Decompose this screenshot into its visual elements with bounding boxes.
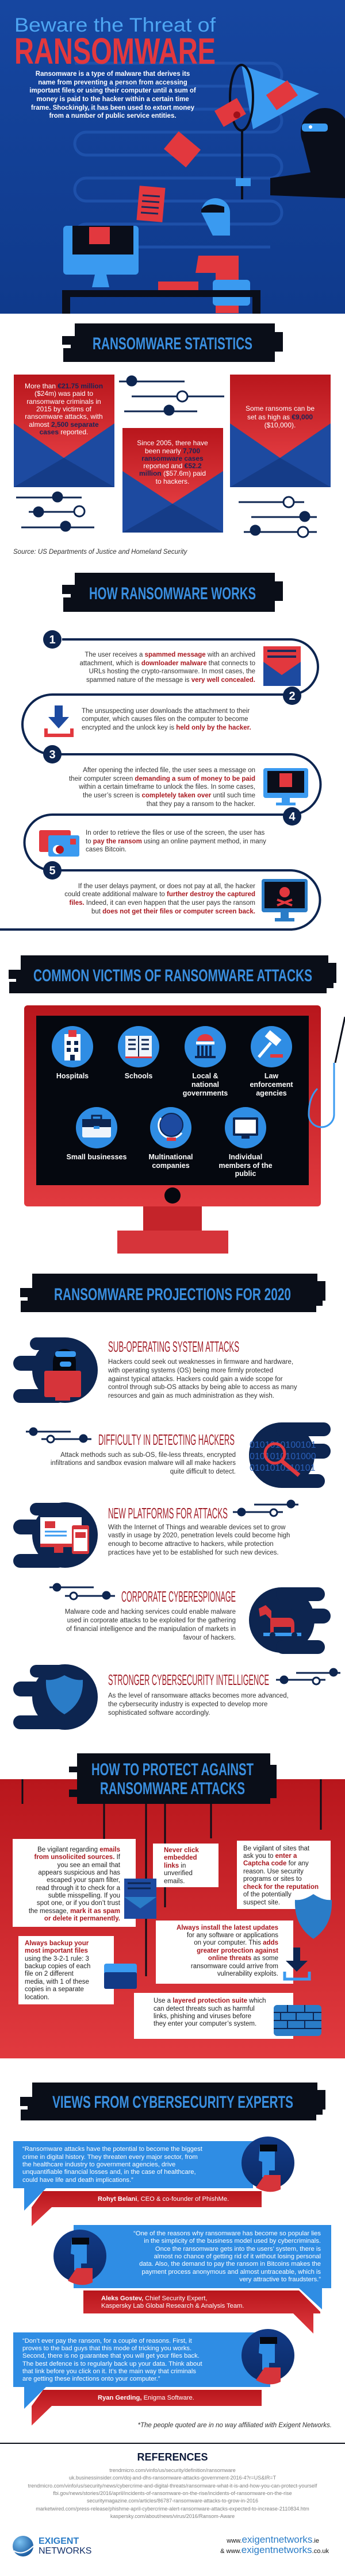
- quote 1: “Ransomware attacks have the potential to become the biggest: [22, 2146, 203, 2153]
- step 4: [39, 830, 266, 857]
- step numbers: 5: [49, 865, 56, 877]
- tip: backups: copies in a separate: [25, 1986, 84, 1993]
- heading: common victims: [9, 955, 336, 993]
- projection 4: corporate cyberespionage: favour of hackers.: [183, 1634, 236, 1641]
- icon: download: [46, 705, 72, 735]
- tip: updates: online threats as some: [208, 1955, 278, 1962]
- tip: emails: you see an email that: [57, 1862, 121, 1869]
- icon: monitor with skull: [262, 879, 308, 921]
- step 1: attachment, which is downloader malware that connects to: [79, 660, 255, 667]
- step 3: [69, 767, 308, 808]
- icon: shield: [295, 1894, 332, 1939]
- projection 2: detecting hackers: Attack methods such as sub-OS, file-less threats, encrypted: [60, 1452, 236, 1459]
- tip: emails: from unsolicited sources. If: [34, 1854, 121, 1861]
- step numbers: 4: [289, 811, 296, 823]
- step 1: [79, 646, 301, 686]
- stat envelope: right: [230, 375, 331, 487]
- stat envelope: left: 2015 by victims of: [36, 405, 92, 413]
- stat envelope: left: ($24m) was paid to: [34, 390, 93, 398]
- victim labels: [56, 1072, 293, 1178]
- tip: captcha: [237, 1841, 331, 1909]
- website urls: [220, 2534, 329, 2555]
- projection 3: new platforms: enough to become attractive to hackers, while protection: [108, 1541, 274, 1548]
- tip: updates: for any software or applications: [187, 1932, 278, 1939]
- victim labels: agencies: [256, 1089, 287, 1097]
- title: Beware the Threat of: [14, 14, 216, 36]
- projection 5: stronger intelligence: [13, 1664, 340, 1730]
- victim labels: companies: [152, 1162, 190, 1170]
- tip: emails: or delete it permanently.: [44, 1915, 120, 1922]
- heading: how to protect: HOW TO PROTECT AGAINST: [91, 1760, 254, 1779]
- projection 4: corporate cyberespionage: Malware code and hacking services could enable malware: [65, 1609, 236, 1615]
- stat envelope: middle: ransomware cases: [141, 454, 204, 462]
- projection 4: corporate cyberespionage: [49, 1584, 331, 1654]
- icon: payment cards: [39, 830, 79, 857]
- heading: projections: [20, 1274, 325, 1312]
- references: trendmicro.com/vinfo/us/security/news/cybercrime-and-digital-threats/ransomware-what-it-is-and-how-you-can-protect-yourself: [28, 2483, 317, 2489]
- tip: captcha: suspect site.: [243, 1899, 280, 1906]
- stat envelope: right: ($10,000).: [264, 421, 296, 429]
- quote 2: payment process anonymous and almost untraceable, which is: [141, 2269, 321, 2276]
- illustration: hacker with net: [136, 65, 345, 222]
- hero banner: [0, 0, 345, 314]
- step 4: cases Bitcoin.: [86, 846, 126, 853]
- tip: backups: most important files: [25, 1948, 88, 1954]
- projection 3: new platforms: vastly in usage by 2020, penetration levels could become high: [108, 1532, 290, 1539]
- projection 1: sub-os attacks: [13, 1337, 297, 1403]
- stat envelope: middle: reported and €52.2: [143, 462, 202, 470]
- stat envelope: middle: million ($57.6m) paid: [139, 469, 206, 477]
- quote 1: [13, 2137, 294, 2226]
- tip: backups: Always backup your: [25, 1940, 89, 1947]
- logo: [13, 2536, 91, 2556]
- heading: how ransomware works: [62, 573, 283, 612]
- intro text: frame. Shockingly, it has been used to extort money: [31, 105, 195, 111]
- tip: emails: spot one, or if you don’t trust: [37, 1900, 121, 1907]
- step 3: that they pay a ransom to the hacker.: [147, 801, 255, 808]
- step numbers: 2: [289, 690, 296, 703]
- website urls: www.exigentnetworks.ie: [226, 2534, 319, 2545]
- references: securitymagazine.com/articles/86787-ransomware-attacks-to-grow-in-2016: [87, 2498, 258, 2504]
- projection 5: stronger intelligence: sophisticated software accordingly.: [108, 1710, 210, 1717]
- tip: emails: escaped your spam filter,: [47, 1877, 120, 1884]
- icon: hacker at computer: [13, 1337, 98, 1403]
- icon: magnifier over code: [249, 1422, 331, 1488]
- stat envelope: left: More than €21.75 million: [25, 382, 103, 390]
- tip: captcha: programs or sites to: [243, 1876, 302, 1883]
- stat envelope: middle: Since 2005, there have: [137, 439, 208, 447]
- victim labels: Hospitals: [56, 1072, 89, 1080]
- tip: updates: vulnerability exploits.: [217, 1970, 278, 1977]
- quote 1: crime in digital history. They threaten every major sector, from: [22, 2154, 198, 2161]
- victim labels: Small businesses: [67, 1153, 127, 1161]
- logo: EXIGENT: [39, 2536, 79, 2546]
- intro text: from a number of public service entities.: [49, 113, 177, 119]
- tip: updates: greater protection against: [197, 1948, 278, 1954]
- projection 3: new platforms: With the Internet of Things and wearable devices set to grow: [108, 1524, 286, 1531]
- tip: emails: subtle misspelling. If you: [48, 1892, 120, 1899]
- icon: small businesses: [76, 1107, 117, 1148]
- intro text: money is paid to the hacker within a certain time: [36, 96, 189, 103]
- quote 2: Aleks Gostev, Chief Security Expert,: [101, 2295, 207, 2302]
- icon: devices: [13, 1502, 98, 1568]
- tip: links: unverified: [164, 1870, 193, 1877]
- quote 3: [13, 2329, 294, 2425]
- tip: links: links in: [164, 1862, 186, 1869]
- tip: backups: location.: [25, 1994, 49, 2001]
- step 2: [46, 705, 251, 735]
- quote 3: Second, there is no guarantee that you will get your files back.: [22, 2353, 200, 2359]
- tip: emails: Be vigilant regarding emails: [37, 1846, 120, 1853]
- tip: updates: ransomware could arrive from: [191, 1963, 278, 1970]
- tip: backups: file on 2 different: [25, 1970, 74, 1977]
- tip: links: emails.: [164, 1878, 185, 1885]
- panel: how to protect: [0, 1753, 345, 2058]
- heading: ransomware statistics: [62, 323, 283, 362]
- source note: Source: US Departments of Justice and Homeland Security: [13, 549, 188, 556]
- stat envelope: left: ransomware attacks, with: [25, 412, 103, 421]
- tip: protection suite: Use a layered protection suite which: [154, 1997, 266, 2004]
- icon: envelope: [263, 646, 301, 686]
- victim labels: Individual: [229, 1153, 262, 1161]
- quote 2: data. Also, the demand to pay the ransom in Bitcoins makes the: [139, 2261, 321, 2268]
- tip: emails: [13, 1839, 136, 1927]
- icon: magnifier over code: 0101010110101: [250, 1463, 316, 1473]
- victim labels: Law: [264, 1072, 278, 1080]
- tip: captcha: of the potentially: [243, 1891, 292, 1898]
- references: fbi.gov/news/stories/2016/april/incidents-of-ransomware-on-the-rise/incidents-of-ransomware-on-the-rise: [53, 2490, 292, 2496]
- victim labels: public: [235, 1170, 256, 1178]
- projection 3: new platforms: [13, 1501, 298, 1568]
- victim labels: members of the: [218, 1162, 273, 1170]
- icon: shield: [13, 1664, 98, 1730]
- tip: captcha: Captcha code for any: [243, 1860, 309, 1867]
- quote 1: Rohyt Belani, CEO & co-founder of PhishMe.: [98, 2196, 229, 2203]
- tip: protection suite: [134, 1993, 293, 2039]
- tip: backups: using the 3-2-1 rule: 3: [25, 1956, 89, 1962]
- intro text: important files or using their computer until a sum of: [29, 87, 196, 94]
- icon: avatar: [53, 2230, 106, 2285]
- icon: multinational companies: [150, 1107, 191, 1148]
- tip: links: Never click: [164, 1847, 199, 1854]
- illustration: victim at computer: [62, 198, 260, 314]
- step numbers: [43, 630, 301, 880]
- stat envelope: right: set as high as €9,000: [247, 413, 313, 421]
- quote 2: Once the ransomware gets into the users’ system, there is: [155, 2246, 321, 2253]
- quote 3: proves to the bad guys that this mode of tricking you works.: [22, 2345, 191, 2352]
- quote 2: almost no chance of getting rid of it without losing personal: [154, 2253, 321, 2260]
- website urls: & www.exigentnetworks.co.uk: [220, 2544, 329, 2555]
- tip: captcha: reason. Use security: [243, 1868, 304, 1875]
- stat envelope: left: [14, 375, 114, 487]
- icon: individuals: [225, 1107, 266, 1148]
- projection 4: corporate cyberespionage: of financial intelligence and the manipulation of markets in: [66, 1626, 236, 1633]
- references: marketwired.com/press-release/phishme-april-cybercrime-alert-ransomware-attacks-expected-to-increase-2110834.htm: [36, 2506, 309, 2512]
- heading: ransomware statistics: RANSOMWARE STATISTICS: [93, 334, 252, 353]
- step numbers: 3: [49, 749, 56, 761]
- step 3: their computer screen demanding a sum of money to be paid: [69, 776, 255, 782]
- quote 1: could have life and death implications.”: [22, 2177, 133, 2184]
- step 1: The user receives a spammed message with an archived: [85, 651, 255, 658]
- logo: NETWORKS: [39, 2546, 91, 2556]
- stat envelope: left: cases reported.: [40, 428, 88, 436]
- icon: magnifier over code: 0101010101000: [250, 1452, 316, 1461]
- projection 3: new platforms: practices have yet to be established for such new devices.: [108, 1549, 279, 1556]
- step 2: encrypted and the unlock key is held only by the hacker.: [82, 724, 251, 731]
- icon: magnifier over code: 0101010100101: [250, 1440, 316, 1450]
- step 1: spammed nature of the message is very well concealed.: [86, 677, 255, 684]
- step 5: but does not get their files or computer screen back.: [91, 908, 255, 915]
- references: uk.businessinsider.com/doj-and-dhs-ransomware-attacks-government-2016-4?r=US&IR=T: [69, 2475, 277, 2481]
- stat envelope: middle: to hackers.: [156, 477, 189, 485]
- projection 5: stronger intelligence: the cybersecurity industry is expected to develop more: [108, 1701, 267, 1708]
- step 2: The unsuspecting user downloads the attachment to their: [82, 708, 250, 715]
- projection 1: sub-os attacks: resources and gain as much administration as they wish.: [108, 1393, 274, 1399]
- references: trendmicro.com/vinfo/us/security/definition/ransomware: [109, 2467, 236, 2473]
- heading: how to protect: [69, 1753, 277, 1804]
- icon: trojan horse: [249, 1587, 331, 1654]
- projection 1: sub-os attacks: against typical attacks. Hackers could gain a wide scope for: [108, 1376, 283, 1383]
- quote 3: “Don’t ever pay the ransom, for a couple of reasons. First, it: [22, 2338, 193, 2344]
- tip: backups: backup copies of each: [25, 1963, 90, 1970]
- icon: avatar: [241, 2329, 294, 2384]
- icon: hospitals: [52, 1026, 93, 1067]
- tip: updates: Always install the latest updates: [177, 1925, 278, 1931]
- quote 2: in the simplicity of the business model used by cybercriminals.: [144, 2238, 321, 2245]
- tip: updates: [156, 1921, 293, 1984]
- step 5: [64, 879, 308, 921]
- tip: backups: [18, 1936, 114, 2004]
- references: [28, 2451, 317, 2519]
- steps path: [0, 639, 321, 930]
- heading: how ransomware works: HOW RANSOMWARE WORKS: [89, 584, 256, 603]
- step 3: After opening the infected file, the user sees a message on: [83, 767, 255, 774]
- icon: firewall: [274, 2005, 321, 2036]
- tip: emails: read through it to check for a: [36, 1885, 121, 1892]
- heading: views from experts: [20, 2083, 325, 2120]
- projection 1: sub-os attacks: control through sub-OS attacks by being able to access as many: [108, 1384, 297, 1391]
- projection 2: detecting hackers: infiltrations and sandbox evasion malware will all make hackers: [51, 1460, 236, 1467]
- intro text: name from preventing a person from accessing: [38, 79, 187, 86]
- victim labels: national: [191, 1081, 219, 1089]
- icon: envelope: [124, 1879, 156, 1919]
- quote 2: [53, 2225, 331, 2334]
- intro text: [29, 71, 196, 119]
- tip: captcha: ask you to enter a: [243, 1853, 297, 1860]
- projection 3: new platforms: NEW PLATFORMS FOR ATTACKS: [108, 1505, 228, 1522]
- victim labels: governments: [183, 1089, 228, 1097]
- step 1: URLs hosting the crypto-ransomware. In most cases, the: [89, 668, 255, 675]
- stat envelope: left: almost 2,500 separate: [29, 421, 99, 429]
- tip: captcha: Be vigilant of sites that: [243, 1845, 310, 1852]
- tip: backups: media, with 1 of these: [25, 1979, 89, 1985]
- tip: protection suite: links, phishing and viruses before: [154, 2013, 251, 2020]
- icon: law enforcement: [251, 1026, 292, 1067]
- panel: victims monitor: [24, 1005, 321, 1254]
- icon: folder: [104, 1964, 137, 1989]
- intro text: Ransomware is a type of malware that derives its: [36, 71, 190, 78]
- quote 3: The best defence is to regularly back up your data. Think about: [22, 2361, 203, 2367]
- stat envelope: middle: [122, 428, 223, 533]
- step 2: computer, which causes files on the computer to become: [82, 716, 248, 723]
- stat envelope: left: ransomware criminals in: [26, 398, 101, 406]
- step 4: to pay the ransom using an online payment method, in many: [86, 838, 266, 845]
- tip: protection suite: can detect threats such as harmful: [154, 2006, 255, 2012]
- icon: schools: [118, 1026, 159, 1067]
- disclaimer: *The people quoted are in no way affiliated with Exigent Networks.: [137, 2422, 332, 2429]
- tip: links: [153, 1844, 218, 1887]
- victim labels: Multinational: [148, 1153, 193, 1161]
- projection 5: stronger intelligence: As the level of ransomware attacks becomes more advanced,: [108, 1692, 289, 1699]
- tip: emails: the message, mark it as spam: [29, 1908, 120, 1915]
- icon: fishing hook: [309, 1017, 345, 1127]
- quote 1: the healthcare industry to government agencies, drive: [22, 2161, 175, 2168]
- icon: monitor with ransom note: [263, 768, 308, 805]
- step 5: If the user delays payment, or does not pay at all, the hacker: [78, 883, 255, 890]
- quote 3: that link before you click on it. It’s the main way that criminals: [22, 2368, 196, 2375]
- projection 1: sub-os attacks: Hackers could seek out weaknesses in firmware and hardware,: [108, 1359, 293, 1366]
- heading: how to protect: RANSOMWARE ATTACKS: [100, 1779, 245, 1798]
- victim labels: Schools: [125, 1072, 152, 1080]
- projection 2: detecting hackers: quite difficult to detect.: [170, 1468, 236, 1475]
- tip: emails: appears suspicious and has: [38, 1869, 120, 1876]
- step numbers: 1: [49, 634, 56, 646]
- tip: captcha: check for the reputation: [243, 1884, 319, 1891]
- quote 3: Ryan Gerding, Enigma Software.: [98, 2394, 194, 2401]
- icon: governments: [185, 1026, 226, 1067]
- projection 4: corporate cyberespionage: used in corporate attacks to be exploited for the gathering: [67, 1617, 236, 1624]
- quote 2: Kaspersky Lab Global Research & Analysis Team.: [101, 2303, 244, 2309]
- quote 2: “One of the reasons why ransomware has become so popular lies: [133, 2230, 321, 2237]
- step 3: within a certain timeframe to unlock the files. In some cases,: [78, 784, 255, 790]
- stat envelope: right: Some ransoms can be: [246, 404, 315, 412]
- projection 2: detecting hackers: [26, 1422, 331, 1488]
- references: REFERENCES: [137, 2451, 208, 2463]
- quote 3: are getting these infections onto your computer.”: [22, 2376, 160, 2382]
- icon: avatar: [241, 2137, 294, 2192]
- step 4: In order to retrieve the files or use of the screen, the user has: [86, 830, 265, 836]
- title: RANSOMWARE: [14, 30, 216, 72]
- step 5: files. Indeed, it can even happen that the user pays the ransom: [69, 900, 255, 907]
- quote 1: unquantifiable financial losses and, in the case of healthcare,: [22, 2169, 196, 2176]
- tip: updates: on your computer. This adds: [194, 1939, 278, 1946]
- victim labels: enforcement: [250, 1081, 293, 1089]
- icon: download: [285, 1948, 309, 1979]
- step 5: could create additional malware to further destroy the captured: [64, 891, 255, 898]
- tip: protection suite: they enter your computer’s system.: [154, 2020, 256, 2027]
- stat envelope: middle: been nearly 7,700: [145, 447, 200, 455]
- tip: links: embedded: [164, 1854, 197, 1861]
- quote 2: very attractive to fraudsters.”: [239, 2276, 321, 2283]
- victim labels: Local &: [192, 1072, 218, 1080]
- step 3: the user’s screen is completely taken over until such time: [83, 792, 255, 799]
- title: [14, 14, 216, 72]
- projection 1: sub-os attacks: with operating systems (OS) being more firmly protected: [108, 1367, 273, 1374]
- references: kaspersky.com/about/news/virus/2016/Ransom-Aware: [110, 2513, 235, 2519]
